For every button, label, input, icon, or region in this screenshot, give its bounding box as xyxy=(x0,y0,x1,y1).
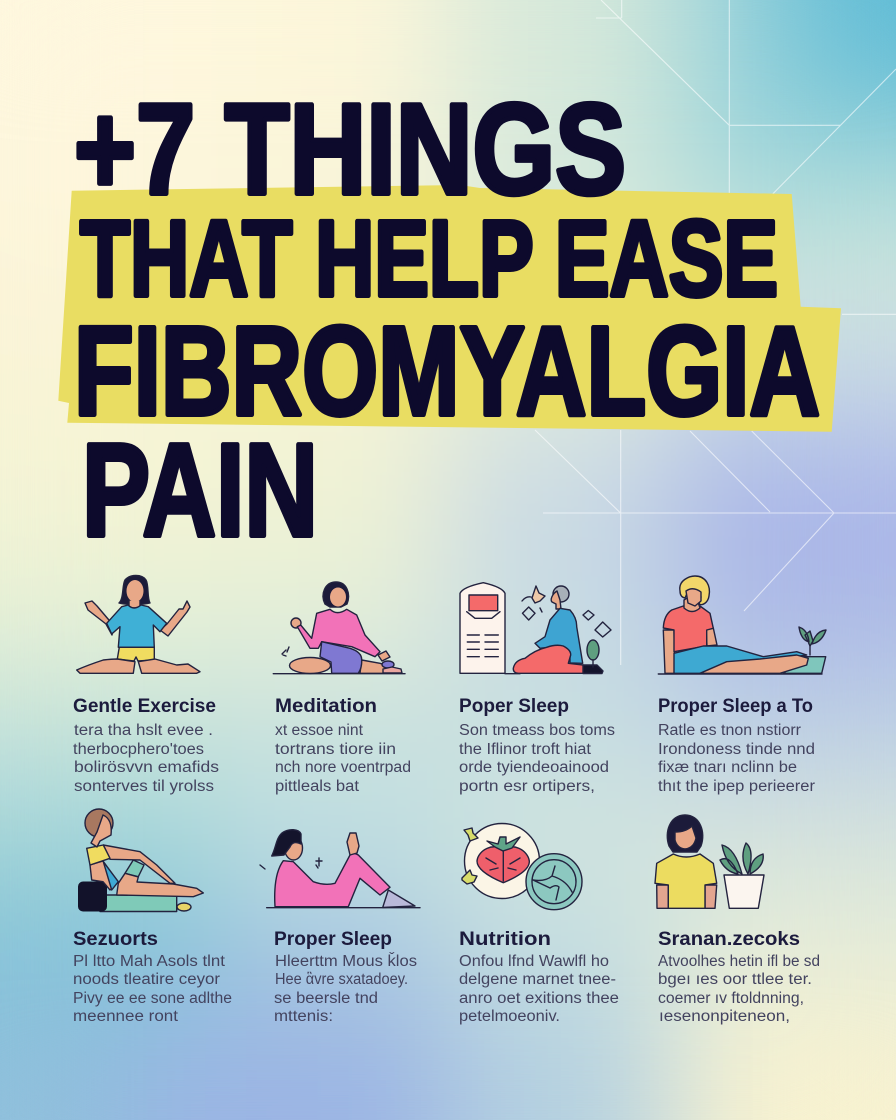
body text: meennee ront xyxy=(73,1008,179,1025)
heading: Poper Sleep xyxy=(459,696,569,717)
icon: reclining woman with phone xyxy=(260,830,420,908)
body text: mttenis: xyxy=(274,1008,333,1025)
body text: delgene marnet tnee- xyxy=(459,971,616,988)
body text xyxy=(658,953,820,1025)
body text xyxy=(73,722,219,795)
body text: Pivy ee ee sone adlthe xyxy=(73,990,232,1007)
body text: bolirösvvn emafids xyxy=(74,759,219,776)
body text: sonterves til yrolss xyxy=(74,778,214,795)
body text: Hee ἃvre sxatadoey. xyxy=(275,971,408,988)
body text xyxy=(73,953,232,1025)
heading: Nutrition xyxy=(459,929,551,950)
body text xyxy=(459,953,619,1025)
icon: heart fruit and plate xyxy=(462,824,582,910)
body text: therbocphero'toes xyxy=(73,741,204,758)
body text: Pl ltto Mah Asols tlnt xyxy=(73,953,226,970)
body text: tera tha hslt evee . xyxy=(74,722,213,739)
body text: noods tleatire ceyor xyxy=(73,971,220,988)
body text: petelmoeoniv. xyxy=(459,1008,560,1025)
heading: Meditation xyxy=(275,696,377,717)
panel: sranan zecoks xyxy=(655,815,820,1025)
heading: Proper Sleep a To xyxy=(658,696,813,717)
heading: Proper Sleep xyxy=(274,929,392,950)
panel: sezuorts xyxy=(73,809,232,1025)
body text: thıt the ipep perieerer xyxy=(658,778,815,795)
body text: nch nore voentrpad xyxy=(275,759,411,776)
body text xyxy=(459,722,615,795)
body text: ıesenonpiteneon, xyxy=(659,1008,790,1025)
title: +7 THINGS xyxy=(74,78,626,222)
body text: bgeı ıes oor ttlee ter. xyxy=(658,971,812,988)
body text xyxy=(658,722,815,795)
heading: Sranan.zecoks xyxy=(658,929,800,950)
title: PAIN xyxy=(82,416,318,564)
body text: Irondoness tinde nnd xyxy=(658,741,815,758)
panel: poper sleep xyxy=(459,583,615,795)
body text: Ratle es tnon nstiorr xyxy=(658,722,801,739)
panel: nutrition xyxy=(459,824,619,1025)
icon: reclining person with plant xyxy=(658,576,826,674)
panel: proper sleep xyxy=(260,830,420,1025)
body text: Onfou lfnd Wawlfl ho xyxy=(459,953,609,970)
panel: proper sleep a to xyxy=(658,576,826,795)
body text: portn esr ortipers, xyxy=(459,778,595,795)
body text: fixæ tnarı nclinn be xyxy=(658,759,797,776)
heading: Sezuorts xyxy=(73,929,158,950)
panel: gentle exercise xyxy=(73,576,219,795)
body text: orde tyiendeoainood xyxy=(459,759,609,776)
body text: Atvoolhes hetin ifl be sd xyxy=(658,953,820,970)
body text: Son tmeass bos toms xyxy=(459,722,615,739)
body text: xt essoe nint xyxy=(275,722,364,739)
icon: seated stretching woman xyxy=(77,576,200,673)
title highlight xyxy=(58,185,841,432)
icon: sleep chart and seated figure xyxy=(460,583,611,674)
panel: meditation xyxy=(273,582,411,795)
body text: pittleals bat xyxy=(275,778,360,795)
icon: meditating woman xyxy=(273,582,405,674)
body text: se beersle tnd xyxy=(274,990,378,1007)
body text xyxy=(275,722,411,795)
body text: the Iflinor troft hiat xyxy=(459,741,592,758)
body text: tortrans tiore iin xyxy=(275,741,396,758)
body text: Hleerttm Mous ǩlos xyxy=(275,953,417,970)
body text xyxy=(274,953,417,1025)
title xyxy=(74,78,820,564)
body text: coemer ıv ftoldnning, xyxy=(658,990,804,1007)
icon: person with potted plant xyxy=(655,815,764,908)
icon: seated stretching person xyxy=(78,809,203,912)
body text: anro oet exitions thee xyxy=(459,990,619,1007)
heading: Gentle Exercise xyxy=(73,696,216,717)
